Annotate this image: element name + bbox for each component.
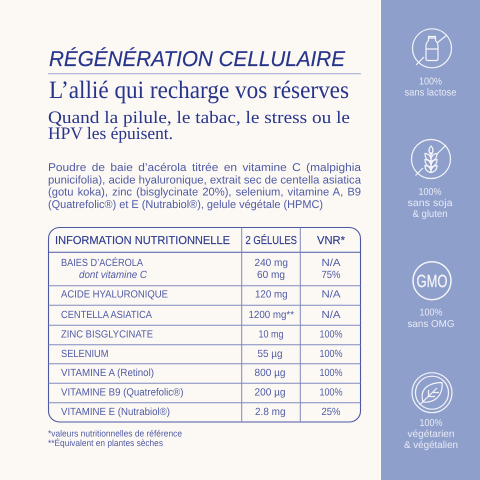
text: sans soja et gluten: 100% [418,187,442,198]
ingredients paragraph: punicifolia), acide hyaluronique, extrait sec de centella asiatica [48,174,362,186]
row: vitamine A [61,368,342,379]
row: acide hyaluronique [61,290,341,301]
text: sans soja et gluten [408,187,453,220]
row: vitamine B9 [61,388,342,399]
text: végétarien et végétalien: & végétalien [404,440,458,451]
row: zinc bisglycinate: ZINC BISGLYCINATE [61,330,153,341]
tagline: Quand la pilule, le tabac, le stress ou le [48,107,350,127]
footnotes [48,428,182,448]
row: vitamine B9: VITAMINE B9 (Quatrefolic®) [61,388,184,399]
row: vitamine E: VITAMINE E (Nutrabiol®) [61,407,170,418]
footnotes: *valeurs nutritionnelles de référence [48,428,182,438]
ingredients paragraph: (Quatrefolic®) et E (Nutrabiol®), gelule végétale (HPMC) [48,199,323,211]
row: centella asiatica: 1200 mg** [248,310,294,321]
row: selenium: 100% [320,349,342,360]
row: vitamine E: 25% [322,407,340,418]
row: acide hyaluronique: N/A [322,290,341,301]
row: vitamine A: 800 µg [254,368,286,379]
ingredients paragraph: Poudre de baie d’acérola titrée en vitamine C (malpighia [48,162,362,174]
text: sans lactose: sans lactose [404,87,457,98]
text: sans OMG: 100% [420,308,443,319]
footnotes: **Équivalent en plantes sèches [48,438,163,448]
title: RÉGÉNÉRATION CELLULAIRE [49,47,346,71]
row: baies d'acérola: dont vitamine C [79,270,147,281]
icon: vegetarian leaf [412,373,452,413]
row: vitamine A: VITAMINE A (Retinol) [61,368,154,379]
row: baies d'acérola: 240 mg [254,258,288,269]
table header [55,234,346,247]
row: vitamine B9: 100% [320,388,342,399]
text: végétarien et végétalien: 100% [420,418,443,429]
row: baies d'acérola [61,256,341,281]
row: selenium: SELENIUM [61,349,108,360]
table grid [48,228,360,422]
row: acide hyaluronique: ACIDE HYALURONIQUE [61,290,168,301]
row: baies d'acérola: N/A [322,258,341,269]
row: zinc bisglycinate: 10 mg [258,330,284,341]
icon: GMO [413,262,451,300]
text: sans soja et gluten: sans soja [408,198,453,209]
row: baies d'acérola: 60 mg [257,270,285,281]
row: baies d'acérola: 75% [322,270,340,281]
row: centella asiatica: N/A [322,310,341,321]
row: centella asiatica [61,310,341,321]
row: centella asiatica: CENTELLA ASIATICA [61,310,152,321]
row: vitamine E [61,407,340,418]
icon: GMO: GMO [416,271,448,291]
row: selenium: 55 µg [258,349,283,360]
text: végétarien et végétalien [404,418,458,451]
row: zinc bisglycinate [61,330,342,341]
text: sans soja et gluten: & gluten [412,209,448,220]
table header: VNR* [317,235,346,247]
panel: side claims [381,0,480,480]
ingredients paragraph [48,162,362,211]
row: vitamine A: 100% [320,368,342,379]
subtitle: L’allié qui recharge vos réserves [49,77,349,104]
row: zinc bisglycinate: 100% [320,330,342,341]
row: acide hyaluronique: 120 mg [255,290,288,301]
text: sans OMG: sans OMG [408,319,455,330]
tagline [48,107,350,143]
nutrition table [48,228,360,422]
icon: no soy and gluten grain [412,140,450,178]
icon: no lactose bottle [412,29,452,68]
text: végétarien et végétalien: végétarien [408,429,454,440]
row: vitamine E: 2.8 mg [255,407,286,418]
ingredients paragraph: (gotu koka), zinc (bisglycinate 20%), selenium, vitamine A, B9 [48,187,361,199]
row: vitamine B9: 200 µg [254,388,286,399]
text: sans OMG [408,308,455,330]
table header: 2 GÉLULES [246,234,297,247]
row: selenium [61,349,342,360]
text: sans lactose: 100% [419,77,442,88]
row: baies d'acérola: BAIES D’ACÉROLA [61,256,143,269]
table header: INFORMATION NUTRITIONNELLE [55,235,230,247]
tagline: HPV les épuisent. [48,123,173,143]
text: sans lactose [404,77,457,98]
